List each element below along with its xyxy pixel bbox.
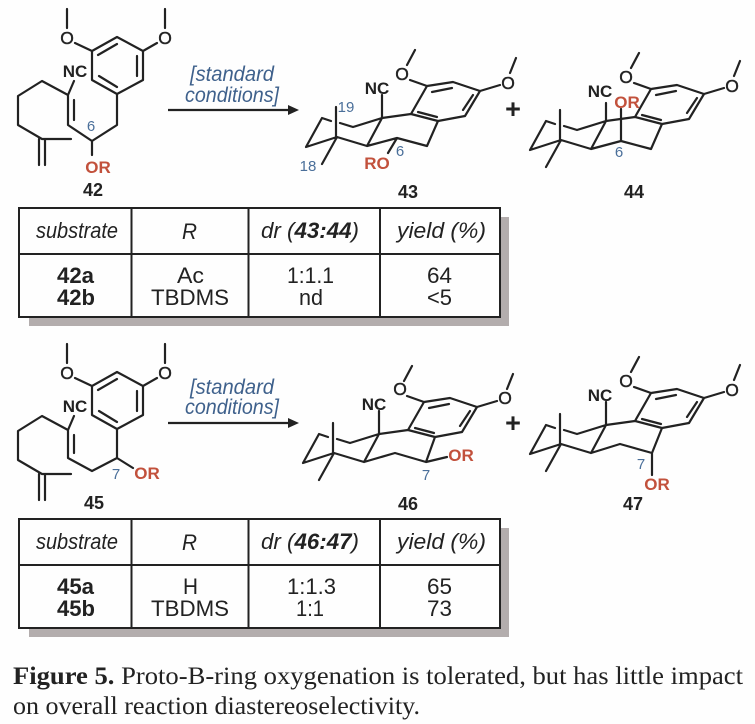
compound 42: NC (63, 62, 87, 81)
compound 44: 44 (624, 182, 644, 202)
compound 44: O (619, 67, 633, 87)
table 2: TBDMS (151, 596, 229, 621)
compound 44: NC (588, 82, 612, 101)
table 1: substrate (36, 218, 118, 243)
table 1: nd (299, 285, 323, 310)
table 2: H (183, 574, 198, 599)
compound 46: NC (362, 395, 386, 414)
plus sign, top: + (505, 94, 521, 124)
compound 43: 6 (396, 143, 404, 160)
table 1: 42b (57, 285, 95, 310)
caption (13, 663, 743, 720)
compound 43: O (395, 64, 409, 84)
compound 45: OR (134, 464, 160, 483)
compound 45 (18, 344, 172, 513)
arrow: standard conditions, bottom (168, 376, 299, 428)
table 2: 1:1 (296, 596, 324, 621)
table 1: 1:1.1 (287, 263, 334, 288)
compound 43: 18 (300, 158, 316, 175)
compound 47: O (725, 380, 739, 400)
table 2: 45b (57, 596, 95, 621)
table 2: dr (46:47) (261, 529, 359, 554)
compound 45: NC (63, 397, 87, 416)
arrow: standard conditions, bottom: [standard (189, 376, 275, 399)
table 2: substrate (36, 529, 118, 554)
compound 42: OR (85, 158, 111, 177)
compound 42: O (60, 28, 74, 48)
table 1: 64 (427, 263, 452, 288)
table 2: 65 (427, 574, 452, 599)
caption: Figure 5. Proto-B-ring oxygenation is tolerated, but has little impact (13, 663, 743, 690)
table 2 (19, 519, 509, 637)
compound 44 (530, 53, 740, 202)
compound 43 (300, 50, 516, 202)
table 2: 45a (57, 574, 95, 599)
compound 47 (530, 357, 740, 514)
compound 42: 6 (87, 118, 95, 135)
compound 42: O (158, 28, 172, 48)
table 1: 42a (57, 263, 95, 288)
plus sign, bottom: + (505, 408, 521, 438)
compound 46: O (498, 388, 512, 408)
table 1: Ac (177, 263, 204, 288)
compound 45: O (158, 363, 172, 383)
compound 45: 7 (112, 466, 120, 483)
compound 43: 43 (398, 182, 418, 202)
compound 46: 46 (398, 494, 418, 514)
compound 47: O (619, 371, 633, 391)
table 2: R (182, 530, 197, 555)
compound 42 (18, 9, 172, 200)
caption: on overall reaction diastereoselectivity. (13, 693, 420, 720)
table 2: 1:1.3 (287, 574, 336, 599)
compound 47: 7 (637, 456, 645, 473)
compound 43: O (501, 73, 515, 93)
compound 44: 6 (615, 144, 623, 161)
compound 44: O (725, 76, 739, 96)
compound 46: 7 (422, 467, 430, 484)
table 1: <5 (427, 285, 452, 310)
compound 43: NC (365, 79, 389, 98)
table 1: yield (%) (395, 218, 486, 243)
table 1: dr (43:44) (261, 218, 359, 243)
arrow: standard conditions, bottom: conditions] (185, 396, 280, 419)
table 2: 73 (427, 596, 452, 621)
table 2: yield (%) (395, 529, 486, 554)
compound 43: 19 (338, 99, 354, 116)
table 1: TBDMS (151, 285, 229, 310)
compound 46: O (393, 379, 407, 399)
compound 47: NC (588, 386, 612, 405)
arrow: standard conditions, top: conditions] (185, 84, 280, 107)
table 1: R (182, 219, 197, 244)
compound 47: 47 (623, 494, 643, 514)
compound 44: OR (614, 93, 640, 112)
compound 45: O (60, 363, 74, 383)
compound 46 (303, 366, 513, 514)
arrow: standard conditions, top: [standard (189, 63, 275, 86)
compound 45: 45 (84, 493, 104, 513)
table 1 (19, 208, 509, 326)
arrow: standard conditions, top (168, 63, 299, 115)
compound 43: RO (364, 154, 390, 173)
compound 47: OR (644, 475, 670, 494)
compound 46: OR (448, 446, 474, 465)
compound 42: 42 (83, 180, 103, 200)
